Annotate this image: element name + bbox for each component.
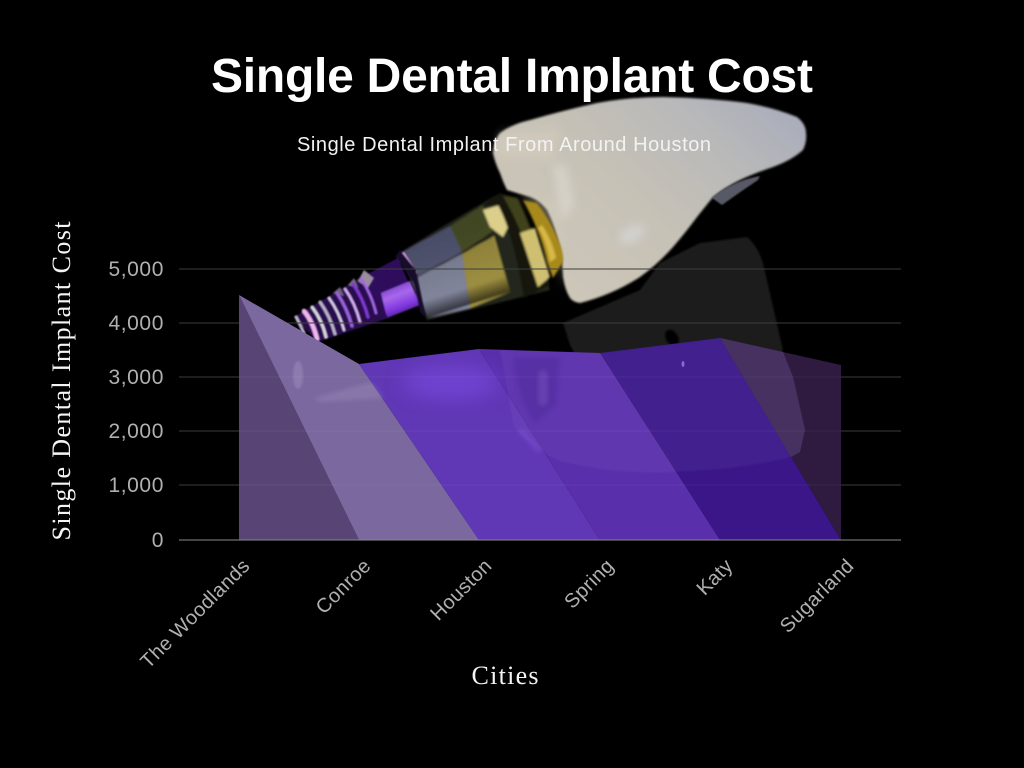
subtitle: Single Dental Implant From Around Houston bbox=[297, 134, 711, 156]
x axis city labels: Sugarland bbox=[776, 555, 859, 638]
y axis tick labels bbox=[108, 258, 164, 552]
x axis city labels: Spring bbox=[560, 555, 619, 613]
y axis tick labels: 3,000 bbox=[108, 366, 164, 389]
crown reflection bbox=[563, 237, 783, 400]
y axis tick labels: 0 bbox=[152, 529, 164, 552]
outer gold ring bbox=[523, 200, 563, 278]
area chart bbox=[239, 295, 841, 540]
segment: The Woodlands bbox=[239, 295, 359, 540]
axis baseline bbox=[179, 539, 901, 541]
segment: Katy bbox=[600, 338, 841, 540]
dark collar bbox=[482, 193, 550, 298]
segment: Houston bbox=[359, 349, 600, 540]
segment: Conroe bbox=[239, 295, 479, 540]
tooth highlights bbox=[497, 130, 648, 290]
x axis city labels: Katy bbox=[693, 555, 738, 600]
x axis city labels: The Woodlands bbox=[137, 555, 255, 673]
x axis city labels bbox=[137, 555, 859, 673]
y axis tick labels: 5,000 bbox=[108, 258, 164, 281]
photo: dental implant with crown bbox=[294, 97, 806, 400]
x axis city labels: Conroe bbox=[312, 555, 376, 619]
reflection on chart bbox=[293, 338, 805, 472]
gold band bbox=[520, 228, 550, 287]
y axis tick labels: 2,000 bbox=[108, 420, 164, 443]
abutment body bbox=[400, 193, 563, 320]
purple shaft bbox=[360, 250, 426, 320]
segment: Spring bbox=[479, 349, 720, 540]
reflection dark spot bbox=[662, 327, 682, 349]
x axis city labels: Houston bbox=[426, 555, 497, 625]
tooth underside shade bbox=[712, 176, 760, 205]
gridlines bbox=[179, 269, 901, 485]
gridlines over chart bbox=[239, 377, 841, 485]
segment: Sugarland bbox=[720, 338, 841, 540]
x axis title: Cities bbox=[472, 661, 538, 690]
y axis tick labels: 1,000 bbox=[108, 474, 164, 497]
y axis tick labels: 4,000 bbox=[108, 312, 164, 335]
title: Single Dental Implant Cost bbox=[211, 50, 813, 103]
implant threads bbox=[294, 270, 388, 342]
tooth crown bbox=[493, 97, 806, 303]
y axis title: Single Dental Implant Cost bbox=[47, 221, 76, 540]
